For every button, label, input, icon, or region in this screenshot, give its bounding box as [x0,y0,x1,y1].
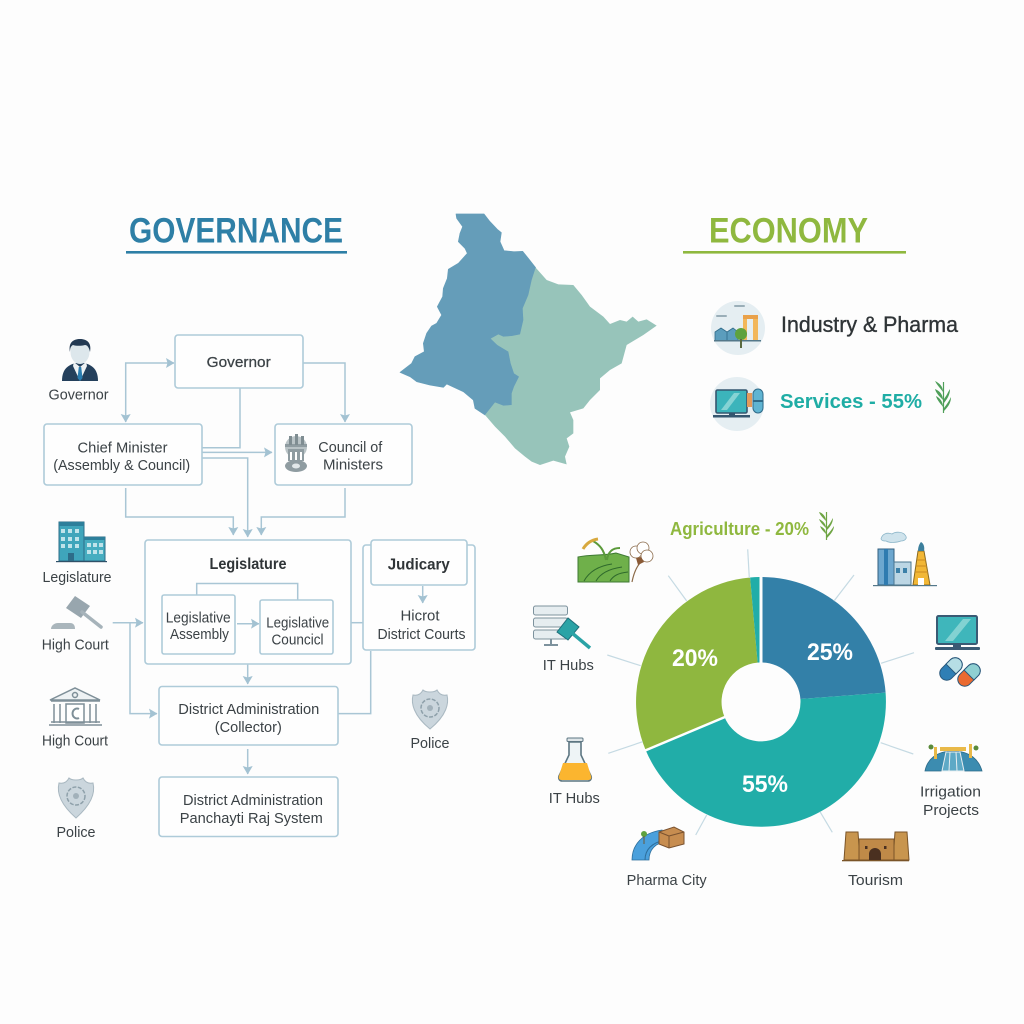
label: IT Hubs: IT Hubs [549,791,600,807]
box: Council of Ministers [275,424,412,485]
map region: green [485,268,657,465]
label: High Court: High Court [42,734,108,750]
box: Council of Ministers: Council of [318,440,383,456]
box: Chief Minister [44,424,202,485]
segment: 55% teal [646,693,886,827]
box: District Administration (Collector) [159,686,338,745]
label: Police: Police [410,736,450,752]
label: 55%: 55% [742,771,788,798]
segment: teal sliver [750,577,760,663]
leader lines [607,549,914,835]
box: District Administration Panchayati Raj: Panchayti Raj System [180,811,323,827]
icon: gavel [51,596,101,629]
arrow: District Administration to Panchayati Raj [247,749,249,774]
box: Legislative Council: Legislative [266,615,329,631]
box: Judiciary: Hicrot [400,609,440,625]
segment: 25% blue [762,577,886,699]
arrow: Chief Minister to Legislature centre [202,458,248,537]
box: Governor: Governor [207,355,271,371]
label: Agriculture 20%: Agriculture - 20% [670,519,809,539]
box: Chief Minister: (Assembly & Council) [53,458,190,474]
heading: Governance: GOVERNANCE [129,211,343,250]
icon: national emblem [285,434,307,472]
arrow: High Court to District Administration [130,623,157,714]
map: two-region state [400,214,657,465]
label: Governor: Governor [48,387,109,403]
donut chart: economy shares [636,577,886,827]
map region: blue [400,214,536,415]
box: Legislature: Legislature [210,556,287,573]
label: 20%: 20% [672,645,718,672]
label: Pharma City: Pharma City [627,873,707,889]
icon: courthouse [49,688,102,725]
box: District Administration (Collector): District Administration [178,702,319,718]
box: Judiciary title: Judicary [388,556,450,573]
icon: server and gavel [534,606,590,648]
connector: Governor to Chief Minister side [202,388,240,448]
icon: police badge [58,778,94,818]
economy item: Services: Services - 55% [780,391,922,413]
label: Irrigation Projects: Irrigation [920,785,981,801]
box: Governor [175,335,303,388]
icon: flask [559,738,591,781]
panel: governance flowchart [44,335,475,836]
arrow: into Governor [160,362,174,364]
arrow: High Court to Legislature [113,622,143,624]
arrow: Legislature to District Administration [247,665,249,684]
label: Police: Police [56,825,96,841]
icon: police badge right [412,690,448,729]
icon: factory and tower [873,532,937,586]
box: Legislative Assembly: Legislative [166,610,231,626]
box: District Administration Panchayati Raj [159,777,338,836]
icon: leaf [819,512,834,540]
connector: Judiciary to District Administration [338,651,371,714]
label: 25%: 25% [807,639,853,666]
box: Legislative Assembly: Assembly [170,627,230,643]
label: Legislature: Legislature [42,570,112,586]
label: Irrigation Projects [920,785,981,819]
arrow: Assembly to Council [237,623,259,625]
icon: agriculture field and cotton [578,539,653,582]
box: District Administration Panchayati Raj: District Administration [183,793,323,809]
icon: Governor person [62,339,98,381]
box: Judiciary [363,540,475,650]
icon: Legislature building [56,522,107,562]
label: Irrigation Projects: Projects [923,803,979,819]
arrow: Chief Minister to Council [202,451,272,453]
box: Legislative Council [260,600,333,654]
heading: Economy: ECONOMY [709,211,868,250]
box: Legislative Council: Councicl [272,632,324,648]
economy item: Services [710,377,951,431]
box: Legislature [145,540,351,664]
label: Agriculture 20% [670,512,834,540]
arrow: Governor to Council [303,363,345,422]
economy item: Industry and Pharma: Industry & Pharma [781,312,959,337]
icon: industry [711,301,765,355]
arrow: Council to Legislature right [261,488,345,535]
arrow: Governor to Chief Minister [126,363,160,422]
label: Tourism: Tourism [848,873,903,889]
box: Chief Minister: Chief Minister [78,440,168,456]
box: Council of Ministers: Ministers [323,458,383,474]
economy item: Industry and Pharma [711,301,959,355]
divider [644,717,725,751]
label: High Court: High Court [42,638,109,654]
label: IT Hubs: IT Hubs [543,658,594,674]
connector: Legislature to Judiciary [351,622,363,624]
icon: dam [925,744,982,771]
box: Legislative Assembly [162,595,235,654]
icon: leaf [935,381,951,413]
box: District Administration (Collector): (Collector) [215,720,282,736]
connector: Assembly and Council link [197,584,298,600]
arrow: Judiciary to courts [422,586,424,603]
segment: 20% green [636,578,758,750]
icon: monitor and pills [935,616,983,689]
box: Judiciary: District Courts [378,627,466,643]
icon: fort [842,832,909,861]
icon: computer and capsule [710,377,764,431]
icon: canal and warehouse [632,827,684,860]
arrow: Chief Minister to Legislature left [126,488,233,535]
